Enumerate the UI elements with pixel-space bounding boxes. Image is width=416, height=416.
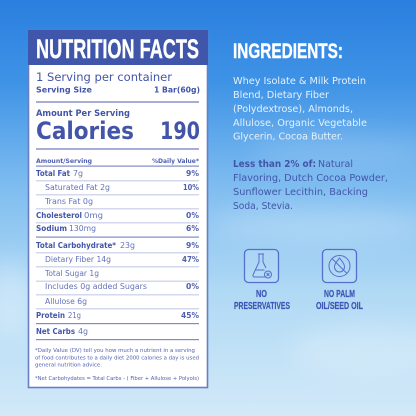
header band <box>28 30 208 65</box>
table header <box>36 157 200 165</box>
table header: %Daily Value* <box>152 157 200 165</box>
text: ingredients list: Whey Isolate & Milk Protein <box>233 76 366 87</box>
row: total fat: Total Fat <box>36 169 70 178</box>
row: cholesterol <box>36 211 199 220</box>
text: ingredients list: Allulose, Organic Vegetable <box>233 118 367 129</box>
label: no preservatives <box>234 289 290 312</box>
row: sodium: 130mg <box>69 224 96 233</box>
text: ingredients list <box>233 76 367 142</box>
row: saturated fat: 10% <box>183 183 199 192</box>
footnote: daily value: of food contributes to a daily diet 2000 calories a day is used <box>35 356 199 362</box>
heading: nutrition facts: NUTRITION FACTS <box>36 34 199 64</box>
row: total carbohydrate: 23g <box>120 241 135 250</box>
heading: ingredients: INGREDIENTS: <box>233 40 343 63</box>
row: added sugars <box>45 282 199 291</box>
text: calories: 190 <box>160 117 200 145</box>
row: sodium: Sodium <box>36 224 67 233</box>
label: no palm oil: OIL/SEED OIL <box>316 301 363 312</box>
row: net carbs: Net Carbs <box>36 327 75 336</box>
row: sodium <box>36 224 199 233</box>
text: serving size: Serving Size <box>36 86 93 94</box>
text: calories <box>36 117 200 145</box>
text: less than 2%: Flavoring, Dutch Cocoa Powder, <box>233 173 388 184</box>
label: no palm oil <box>316 289 363 312</box>
row: protein <box>36 311 199 320</box>
icon: no palm oil <box>322 250 356 282</box>
row: protein: 45% <box>181 311 199 320</box>
row: added sugars: 0% <box>186 282 199 291</box>
footnote: net carbohydrates: *Net Carbohydates = Total Carbs - ( Fiber + Allulose + Polyols) <box>35 376 199 382</box>
row: total fat: 9% <box>186 169 199 178</box>
text: serving size: 1 Bar(60g) <box>154 86 200 94</box>
row: dietary fiber: 47% <box>182 255 199 264</box>
label: no preservatives: PRESERVATIVES <box>234 301 290 312</box>
table header: Amount/Serving <box>36 157 92 165</box>
panel: nutrition facts <box>28 30 208 388</box>
icon: no preservatives <box>244 250 278 282</box>
row: added sugars: Includes 0g added Sugars <box>45 282 147 291</box>
text: less than 2%: Soda, Stevia. <box>233 201 293 212</box>
row: total fat <box>36 169 199 178</box>
row: net carbs: 4g <box>78 327 88 336</box>
footnote: daily value <box>35 348 199 368</box>
row: cholesterol: 0% <box>186 211 199 220</box>
text: less than 2%: Less than 2% of: <box>233 159 316 170</box>
text: less than 2% <box>233 159 388 212</box>
row: total fat: 7g <box>73 169 83 178</box>
text: less than 2%: Natural <box>318 159 353 170</box>
footnote: daily value: general nutrition advice. <box>35 362 102 368</box>
row: protein: 21g <box>68 311 81 320</box>
text: calories: Calories <box>36 117 134 145</box>
row: protein: Protein <box>36 311 65 320</box>
row: saturated fat: Saturated Fat 2g <box>45 183 110 192</box>
text: ingredients list: Glycerin, Cocoa Butter. <box>233 132 343 142</box>
footnote: daily value: *Daily Value (DV) tell you how much a nutrient in a serving <box>35 348 195 354</box>
text: servings per container: 1 Serving per container <box>36 70 172 84</box>
row: saturated fat <box>45 183 199 192</box>
label: no preservatives: NO <box>256 289 267 300</box>
text: ingredients list: Blend, Dietary Fiber <box>233 90 330 101</box>
row: allulose: Allulose 6g <box>45 297 87 306</box>
row: cholesterol: 0mg <box>84 211 103 220</box>
row: sodium: 6% <box>186 224 199 233</box>
row: total carbohydrate <box>36 241 199 250</box>
row: total sugar: Total Sugar 1g <box>44 269 99 278</box>
row: dietary fiber: Dietary Fiber 14g <box>45 255 111 264</box>
row: cholesterol: Cholesterol <box>36 211 82 220</box>
row: total carbohydrate: Total Carbohydrate* <box>36 241 117 250</box>
label: no palm oil: NO PALM <box>324 289 355 300</box>
row: total carbohydrate: 9% <box>186 241 199 250</box>
text: ingredients list: (Polydextrose), Almonds, <box>233 104 353 115</box>
text: amount per serving: Amount Per Serving <box>36 109 130 119</box>
row: trans fat: Trans Fat 0g <box>44 197 93 206</box>
text: serving size <box>36 86 200 94</box>
row: dietary fiber <box>45 255 199 264</box>
text: less than 2%: Sunflower Lecithin, Backing <box>233 187 368 198</box>
